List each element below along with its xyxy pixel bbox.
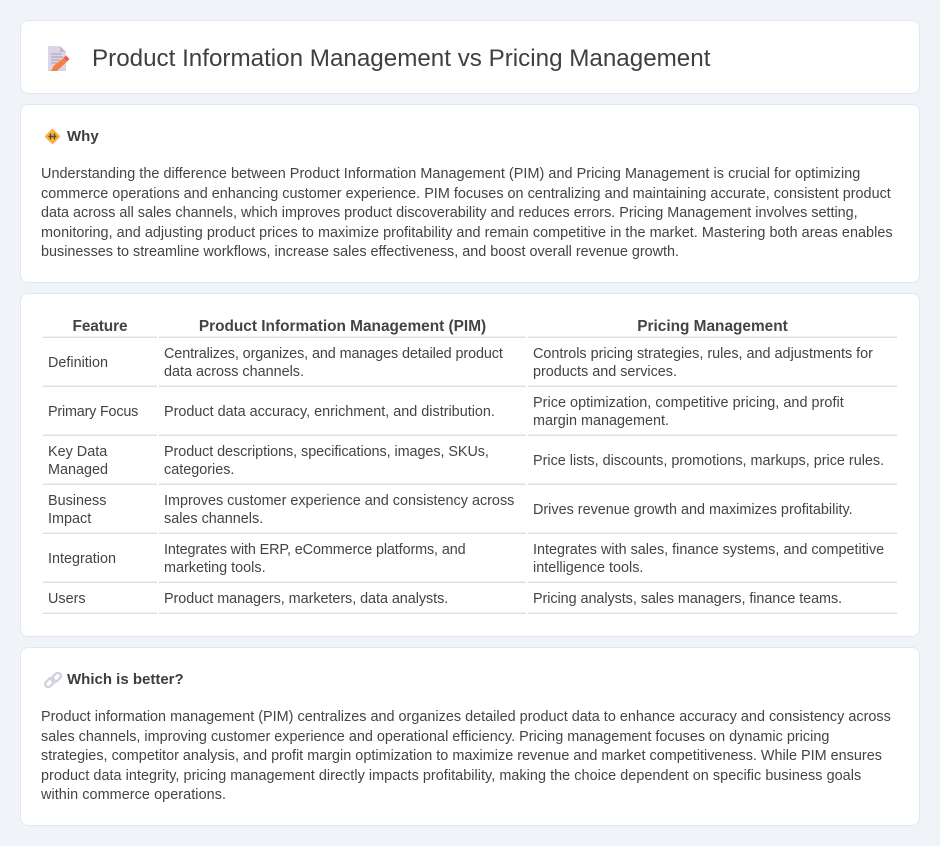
which is better paragraph: Product information management (PIM) centralizes and organizes detailed product data to enhance accuracy and consistency across [41,709,891,725]
row: users: Product managers, marketers, data analysts. [164,591,448,607]
row: business impact: Business [48,493,106,509]
row: primary focus: margin management. [533,413,669,429]
row: integration: intelligence tools. [533,560,643,576]
row: key data managed [48,444,884,478]
which is better paragraph [41,709,891,803]
row: key data managed: Key Data [48,444,107,460]
row: definition: Centralizes, organizes, and manages detailed product [164,346,503,362]
table header: Pricing Management [637,318,788,335]
row: integration: marketing tools. [164,560,266,576]
panel: why [20,104,920,283]
row: definition: products and services. [533,364,677,380]
row: primary focus [48,395,844,429]
row: integration [48,542,884,576]
row: users: Pricing analysts, sales managers, finance teams. [533,591,842,607]
panel: which is better [20,647,920,826]
row: business impact: Improves customer experience and consistency across [164,493,514,509]
row: business impact: Impact [48,511,91,527]
row: primary focus: Price optimization, competitive pricing, and profit [533,395,844,411]
table header: Feature [73,318,127,335]
panel: comparison table [20,293,920,637]
why paragraph: monitoring, and adjusting product prices to maximize profitability and remain competitive in the market. Mastering both areas enables [41,225,893,241]
icon: diamond sign [45,129,60,144]
row: key data managed: Managed [48,462,108,478]
row: users: Users [48,591,86,607]
row: integration: Integrates with ERP, eCommerce platforms, and [164,542,465,558]
row: integration: Integrates with sales, finance systems, and competitive [533,542,884,558]
table header: Product Information Management (PIM) [199,318,486,335]
row: definition: Definition [48,355,108,371]
icon: document with pencil [48,46,70,71]
row: business impact [48,493,853,527]
which is better paragraph: within commerce operations. [41,787,226,803]
row: users [48,591,842,607]
why paragraph: Understanding the difference between Product Information Management (PIM) and Pricing Management is crucial for optimizing [41,166,860,182]
why paragraph: businesses to streamline workflows, increase sales effectiveness, and boost overall revenue growth. [41,244,679,260]
which is better paragraph: product data integrity, pricing management directly impacts profitability, making the choice dependent on specific business goals [41,768,861,784]
row: definition [48,346,873,380]
row: definition: Controls pricing strategies, rules, and adjustments for [533,346,873,362]
why paragraph: data across all sales channels, which improves product discoverability and reduces errors. Pricing Management involves setting, [41,205,858,221]
row: integration: Integration [48,551,116,567]
row: business impact: sales channels. [164,511,263,527]
why paragraph [41,166,893,260]
icon: chain link [44,672,62,688]
row: business impact: Drives revenue growth and maximizes profitability. [533,502,853,518]
row: key data managed: Product descriptions, specifications, images, SKUs, [164,444,489,460]
why paragraph: commerce operations and enhancing customer experience. PIM focuses on centralizing and maintaining accurate, consistent product [41,186,891,202]
heading: which is better: Which is better? [67,671,184,688]
heading: why: Why [67,128,99,145]
which is better paragraph: strategies, competitor analysis, and profit margin optimization to maximize revenue and market competitiveness. While PIM ensures [41,748,882,764]
which is better paragraph: sales channels, improving customer experience and operational efficiency. Pricing management focuses on dynamic pricing [41,729,829,745]
row: key data managed: categories. [164,462,234,478]
row: key data managed: Price lists, discounts, promotions, markups, price rules. [533,453,884,469]
title: Product Information Management vs Pricing Management [92,45,710,72]
row: primary focus: Product data accuracy, enrichment, and distribution. [164,404,495,420]
row: primary focus: Primary Focus [48,404,138,420]
table header [73,318,788,335]
header panel [20,20,920,94]
row: definition: data across channels. [164,364,304,380]
